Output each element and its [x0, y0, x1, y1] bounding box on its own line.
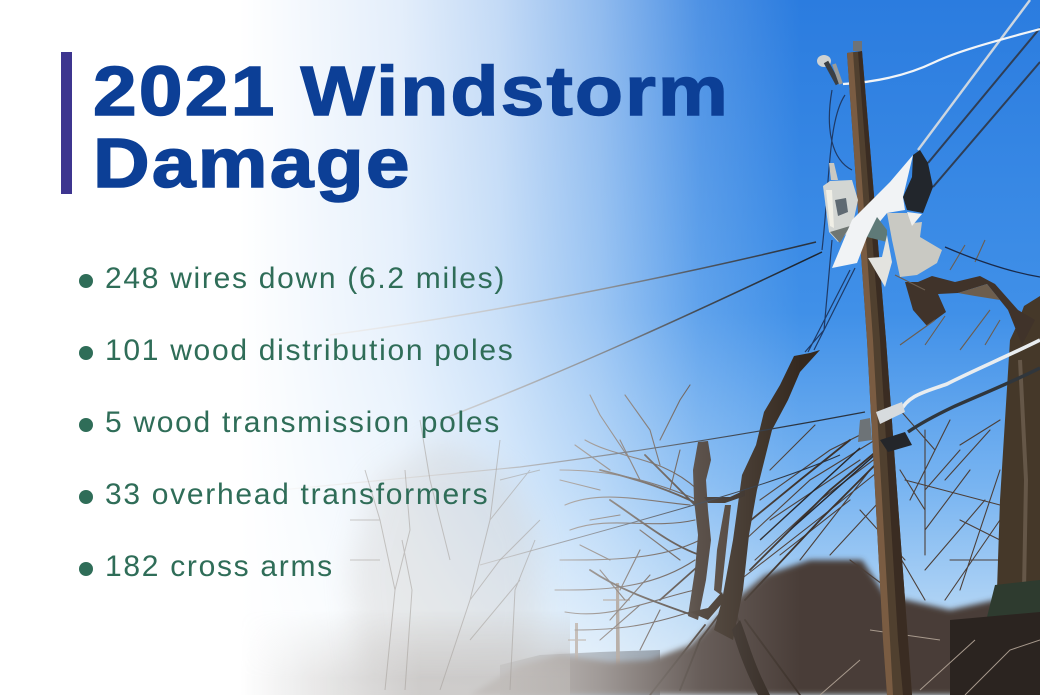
lower pole hardware [858, 402, 912, 452]
bare tree canopy: thin branches [555, 385, 1000, 650]
pole top insulators and cutout [817, 41, 862, 84]
right tree trunk and large limb [895, 240, 1040, 600]
utility pole [847, 51, 912, 695]
broken tree trunks [688, 350, 820, 695]
torn metal sheet caught on wires [832, 150, 942, 287]
dark yard at lower right [820, 580, 1040, 695]
hazy faded tree canopy at left [240, 420, 570, 695]
transformer [823, 163, 858, 243]
item: distribution poles: 101 wood distribution poles [105, 334, 514, 367]
damage list [79, 262, 514, 583]
photo background: damaged utility pole against blue sky [264, 0, 1040, 695]
item: cross arms: 182 cross arms [105, 550, 334, 583]
title: 2021 Windstorm [93, 52, 730, 130]
wires [280, 0, 1040, 565]
brush mass at ground level [470, 560, 1040, 695]
title [93, 52, 730, 203]
title: Damage [93, 124, 412, 202]
item: transmission poles: 5 wood transmission poles [105, 406, 501, 439]
distant hill and far poles [500, 583, 660, 695]
title accent bar [61, 52, 72, 194]
item: wires down: 248 wires down (6.2 miles) [105, 262, 506, 295]
item: transformers: 33 overhead transformers [105, 478, 489, 511]
